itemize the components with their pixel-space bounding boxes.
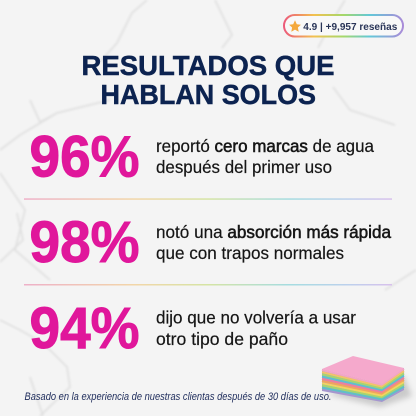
stat text: reportó cero marcas de agua bbox=[156, 136, 376, 156]
title: RESULTADOS QUE bbox=[82, 50, 334, 81]
stat: 98% bbox=[30, 210, 391, 275]
icon: star bbox=[289, 20, 301, 32]
stat: 94% bbox=[30, 296, 356, 361]
footnote: Basado en la experiencia de nuestras clientas después de 30 días de uso. bbox=[24, 391, 332, 403]
title bbox=[82, 50, 334, 110]
stat text: dijo que no volvería a usar bbox=[156, 308, 356, 328]
rating text: 4.9 | +9,957 reseñas bbox=[303, 22, 398, 33]
stat: 94%: 94% bbox=[30, 296, 140, 361]
rating badge bbox=[284, 15, 403, 36]
stat: 98%: 98% bbox=[30, 210, 140, 275]
stat text: notó una absorción más rápida bbox=[156, 222, 395, 242]
stat text: otro tipo de paño bbox=[156, 329, 288, 349]
title: HABLAN SOLOS bbox=[100, 79, 316, 110]
stat text: que con trapos normales bbox=[156, 243, 344, 263]
icon: rainbow cloth stack bbox=[322, 356, 412, 407]
stat text: después del primer uso bbox=[156, 157, 332, 177]
top cloth bbox=[322, 356, 404, 384]
stat: 96%: 96% bbox=[30, 124, 140, 190]
stat: 96% bbox=[30, 124, 374, 190]
